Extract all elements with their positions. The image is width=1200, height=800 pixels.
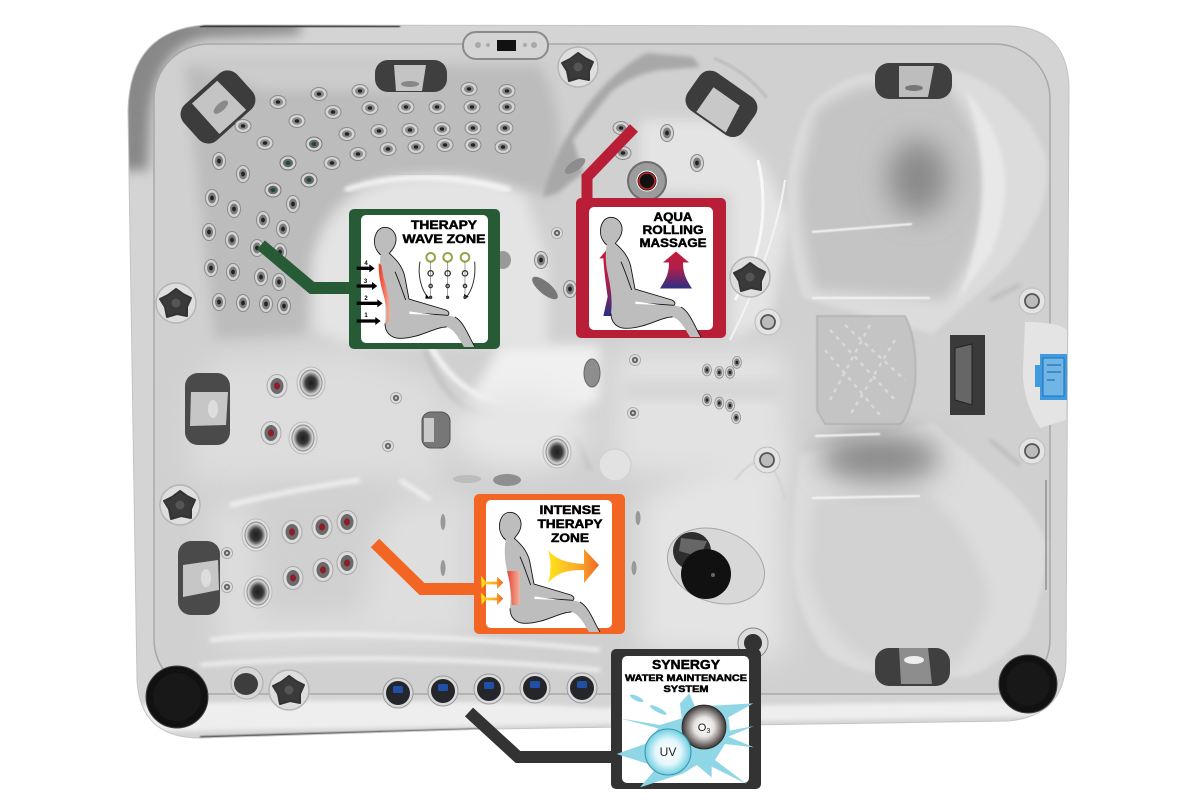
headrests [175,54,952,686]
leader line: therapy wave [261,245,352,288]
water rings and drains [738,288,1045,658]
right lounge seats [788,70,1047,677]
heading [402,218,486,246]
arrow numbers [364,261,368,319]
control panel [463,32,548,59]
figure: aqua rolling seated person [599,217,701,337]
lower seat shading [216,501,466,645]
icon: water splash with UV and ozone spheres [617,693,754,787]
figure: intense therapy seated person [481,512,600,632]
water feature knob [657,515,775,617]
blue control pack [1023,322,1067,428]
heading: AQUA [654,210,693,224]
icon: water splash with UV and ozone spheres: O [698,722,706,734]
figure: therapy wave seated person [357,227,475,347]
massage jets: upper-left therapy wave bench [202,82,515,314]
jets: intense therapy seat [222,510,357,608]
panel: intense therapy zone [474,494,625,634]
heading: WATER MAINTENANCE [625,673,747,684]
arrow numbers: 4 [364,261,368,267]
heading: SYSTEM [664,684,709,695]
panel: aqua rolling massage [576,198,726,338]
heading [538,503,602,545]
seat ridges at right [990,285,1020,465]
panel: synergy water maintenance system [611,649,761,789]
icon: water splash with UV and ozone spheres: UV [660,745,676,759]
jets: central seats [422,122,741,576]
icon: flaring therapy arrow [548,549,599,583]
heading: THERAPY [538,517,602,531]
heading: INTENSE [540,503,600,517]
filter canisters [146,655,1057,728]
panel: therapy wave zone [349,209,500,349]
icon: upward gradient arrow [660,252,692,288]
leader line: synergy [469,712,613,757]
heading: WAVE ZONE [402,232,486,246]
corner swoosh shading [543,53,700,197]
arrow numbers: 3 [364,279,368,285]
hot tub shell [120,20,1080,750]
bench shading [185,65,560,340]
footrest diamond plate [817,316,916,424]
heading: THERAPY [411,218,477,232]
blue-lit front jets [383,673,597,708]
heading: ROLLING [642,223,704,237]
jets: left seat [261,367,402,454]
footwell [474,341,604,411]
heading [640,210,706,250]
heading: MASSAGE [640,236,706,250]
arrow numbers: 1 [364,313,368,319]
left seat shading [195,356,438,480]
leader line: intense therapy [375,543,477,589]
leader line: aqua rolling [587,128,634,200]
valve knobs [156,47,770,710]
icon: water splash with UV and ozone spheres: 3 [706,728,710,735]
pillow box [950,335,985,415]
heading [625,657,747,695]
heading: SYNERGY [652,657,720,672]
right of centre seat [636,474,788,661]
heading: ZONE [551,531,589,545]
arrow numbers: 2 [364,296,368,302]
